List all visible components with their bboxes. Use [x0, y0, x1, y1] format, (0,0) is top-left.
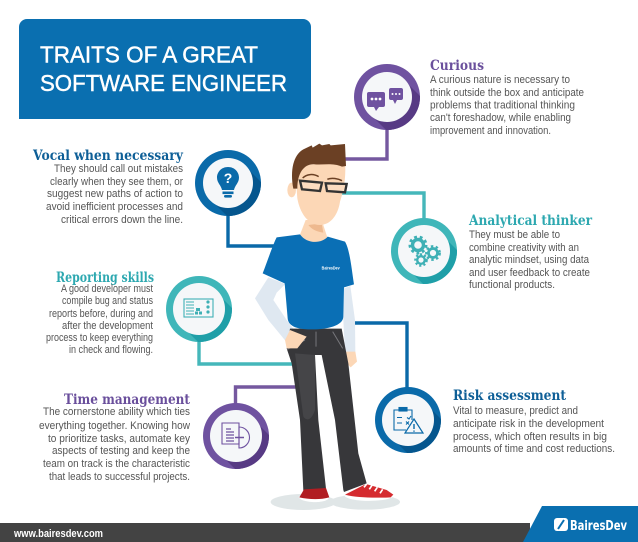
text: reporting skills: after the development	[62, 320, 153, 332]
icon: light bulb: ?	[224, 170, 232, 186]
connector: vocal	[228, 212, 282, 246]
text: curious	[430, 58, 584, 137]
text: analytical thinker: and user feedback to create	[469, 267, 590, 279]
text: analytical thinker: Analytical thinker	[468, 213, 593, 229]
icon circle: time	[203, 403, 269, 469]
text: reporting skills: reports before, during and	[49, 308, 153, 320]
title banner: TRAITS OF A GREAT	[40, 42, 258, 68]
icon: report card	[184, 299, 213, 317]
text: reporting skills	[46, 270, 154, 356]
connector: analytical	[340, 193, 424, 222]
text: time management: The cornerstone ability which ties	[43, 406, 190, 418]
text: analytical thinker	[468, 213, 593, 291]
right sleeve	[343, 286, 355, 352]
footer logo	[523, 506, 638, 542]
icon circle: analytical	[391, 218, 457, 284]
icon circle: vocal	[195, 150, 261, 216]
text: vocal when necessary: They should call out mistakes	[54, 163, 183, 175]
icon circle: reporting	[166, 276, 232, 342]
text: risk assessment: amounts of time and cost reductions.	[453, 443, 615, 455]
text: vocal when necessary: clearly when they see them, or	[50, 176, 183, 188]
text: reporting skills: compile bug and status	[62, 295, 153, 307]
icon: document and clock	[222, 423, 250, 448]
character: software engineer	[255, 144, 400, 510]
text: curious: Curious	[430, 58, 484, 74]
neck	[300, 220, 327, 242]
text: vocal when necessary: critical errors down the line.	[61, 214, 183, 226]
text: time management: everything together. Knowing how	[39, 420, 190, 432]
text: time management: Time management	[64, 392, 190, 408]
text: reporting skills: in check and flowing.	[69, 344, 153, 356]
t-shirt	[263, 234, 354, 329]
right hand	[345, 352, 357, 367]
hair	[292, 144, 346, 189]
text: time management: that leads to successful projects.	[49, 471, 190, 483]
text: time management: team on track is the characteristic	[43, 458, 191, 470]
icon: clipboard and warning	[394, 408, 423, 433]
connector: time	[236, 387, 300, 408]
ground shadow	[271, 494, 400, 510]
text: curious: think outside the box and anticipate	[430, 87, 584, 99]
connector: curious	[340, 125, 387, 159]
text: vocal when necessary: avoid inefficient processes and	[46, 201, 183, 213]
text: curious: problems that traditional thinking	[430, 100, 575, 112]
text: reporting skills: A good developer must	[61, 283, 153, 295]
footer bar	[0, 523, 530, 542]
connector: reporting	[199, 338, 300, 364]
text: analytical thinker: functional products.	[469, 279, 555, 291]
icon: speech bubbles	[367, 88, 403, 111]
connector: risk	[350, 323, 407, 392]
text: risk assessment: Vital to measure, predict and	[453, 405, 578, 417]
text: curious: can't foreshadow, while enabling	[430, 112, 571, 124]
left hand	[285, 330, 307, 348]
text: analytical thinker: They must be able to	[469, 229, 560, 241]
text: analytical thinker: analytic mindset, using data	[469, 254, 589, 266]
text: time management: to prioritize tasks, automate key	[48, 433, 191, 445]
text: vocal when necessary: suggest new paths of action to	[47, 188, 183, 200]
left shoe	[299, 488, 329, 502]
title banner: SOFTWARE ENGINEER	[40, 70, 287, 96]
icon circle: risk	[375, 387, 441, 453]
text: risk assessment: process, which often results in big	[453, 431, 607, 443]
trousers	[287, 329, 367, 492]
icon circle: curious	[354, 64, 420, 130]
title banner	[19, 19, 311, 119]
text: risk assessment: Risk assessment	[453, 388, 566, 404]
text: time management	[39, 392, 191, 483]
left sleeve	[255, 277, 297, 341]
text: analytical thinker: combine creativity with an	[469, 242, 579, 254]
text: reporting skills: Reporting skills	[56, 270, 154, 286]
ear	[287, 183, 296, 197]
text: risk assessment	[453, 388, 615, 455]
shirt logo: BairesDev	[322, 265, 340, 271]
text: vocal when necessary	[32, 148, 184, 226]
text: reporting skills: process to keep everything	[46, 332, 153, 344]
face	[295, 160, 345, 225]
footer bar: www.bairesdev.com	[13, 528, 103, 540]
text: time management: aspects of testing and keep the	[52, 445, 190, 457]
eyebrows	[303, 175, 342, 181]
text: curious: A curious nature is necessary to	[430, 74, 570, 86]
text: curious: improvement and innovation.	[430, 125, 551, 137]
text: risk assessment: anticipate risk in the development	[453, 418, 604, 430]
glasses	[300, 181, 347, 192]
text: vocal when necessary: Vocal when necessary	[32, 148, 184, 164]
right shoe	[345, 484, 394, 501]
icon: gears	[410, 237, 440, 266]
